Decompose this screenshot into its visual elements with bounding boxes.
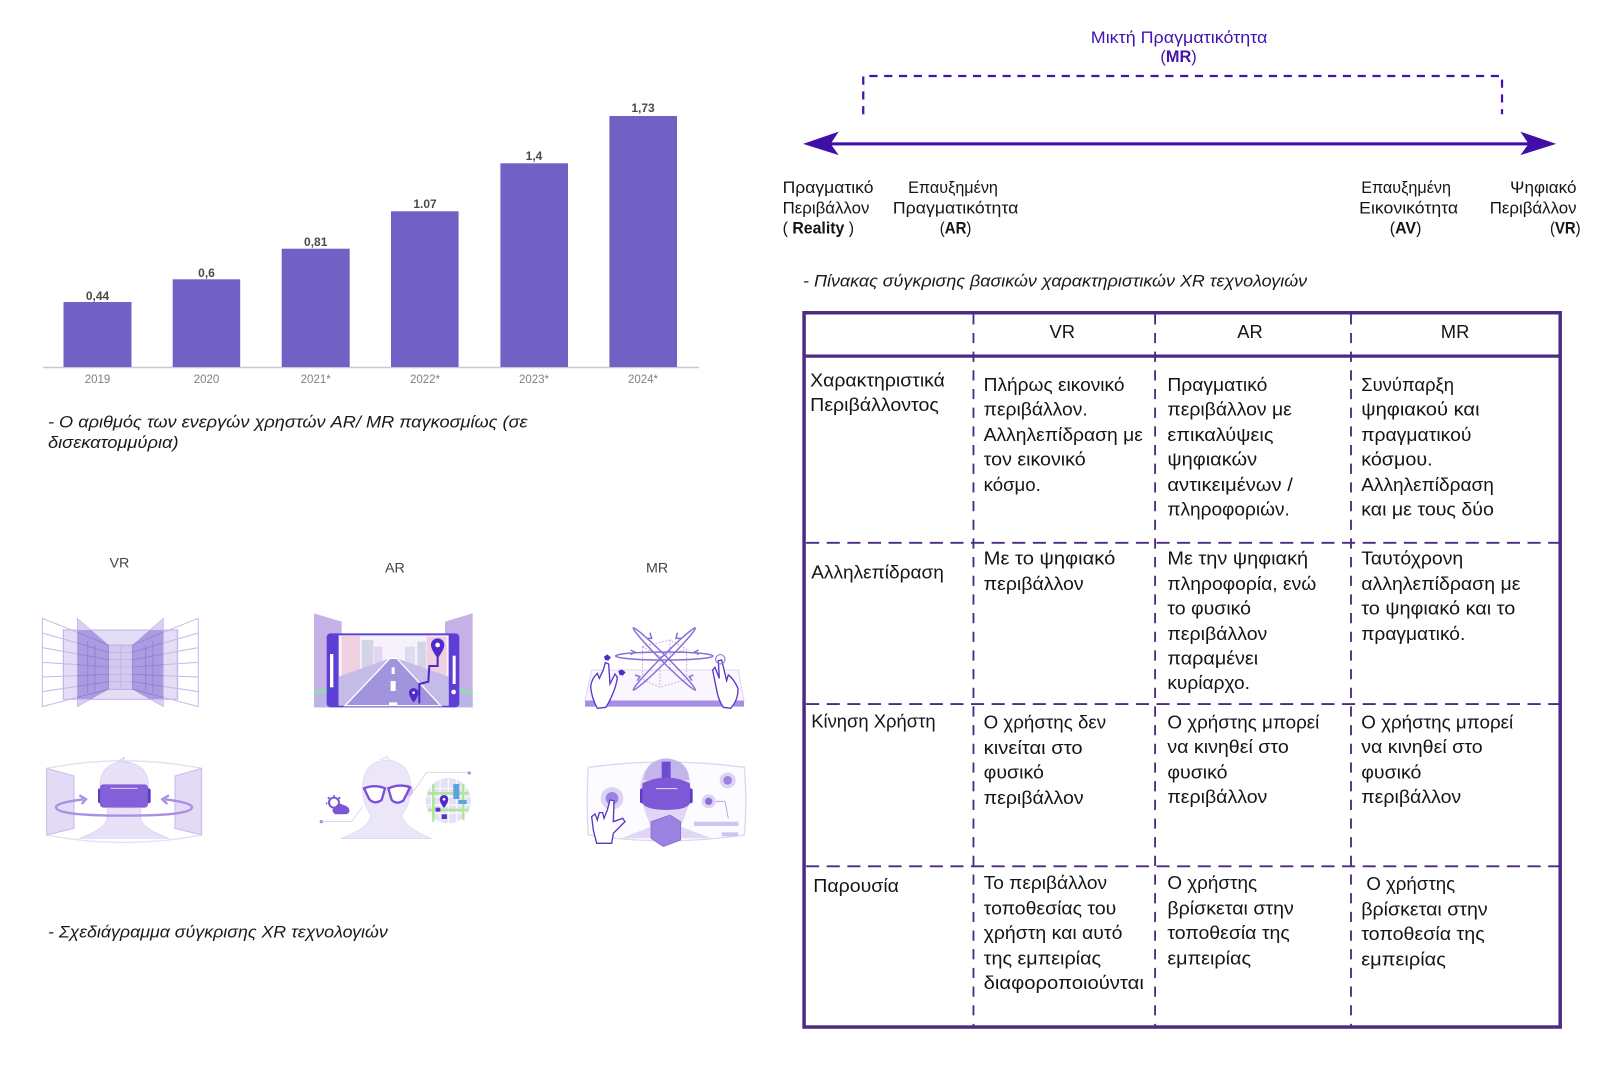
row: user movement: περιβάλλον [1167,786,1267,807]
row: interaction: αλληλεπίδραση με [1361,573,1520,594]
row: environment [810,370,1494,519]
year labels: 2023* [519,374,550,386]
row: environment: ψηφιακού και [1361,398,1480,419]
row: interaction: Με την ψηφιακή [1167,547,1308,568]
row: interaction: Αλληλεπίδραση [811,562,944,583]
row: user movement: κινείται στο [984,737,1083,758]
value labels: 0,44 [86,289,110,303]
label: mixed reality: (MR) [1160,48,1197,66]
row: presence: εμπειρίας [1167,947,1251,968]
row: environment: κόσμο. [984,474,1041,495]
row: interaction [811,547,1520,693]
row: presence: τοποθεσίας του [984,897,1116,918]
row: user movement [811,711,1513,808]
row: environment: Χαρακτηριστικά [810,370,945,391]
column labels: VR AR MR: AR [385,560,405,576]
row: interaction: το ψηφιακό και το [1361,597,1515,618]
label: VR [1490,179,1581,238]
year labels: 2021* [301,374,331,386]
row: interaction: πληροφορία, ενώ [1167,573,1316,594]
caption: chart: - Ο αριθμός των ενεργών χρηστών AR/ MR παγκοσμίως (σε [48,414,528,432]
row: user movement: να κινηθεί στο [1167,736,1289,757]
label: AR: Επαυξημένη [908,179,998,197]
row: user movement: περιβάλλον [1361,786,1461,807]
row: presence: Παρουσία [813,875,899,896]
row: presence: Ο χρήστης [1366,873,1455,894]
row: interaction: παραμένει [1167,647,1258,668]
year labels [85,374,659,386]
icon: AR phone navigation [314,613,473,707]
value labels [86,101,655,303]
row: environment: Περιβάλλοντος [810,394,939,415]
value labels: 1.07 [413,197,437,211]
row: interaction: περιβάλλον [1167,623,1267,644]
value labels: 1,73 [631,101,655,115]
bars [64,116,677,367]
row: environment: και με τους δύο [1361,498,1494,519]
row: environment: κόσμου. [1361,448,1433,469]
year labels: 2022* [410,374,441,386]
caption: chart [48,414,528,452]
row: environment: Συνύπαρξη [1361,374,1454,395]
label: AV: Επαυξημένη [1361,179,1451,197]
row: interaction: Με το ψηφιακό [984,547,1115,568]
column labels: VR AR MR: MR [646,560,668,576]
table header: MR [1441,321,1469,342]
row: interaction: πραγματικό. [1361,623,1465,644]
row: environment: Αλληλεπίδραση [1361,474,1494,495]
row: environment: περιβάλλον με [1167,398,1292,419]
row: presence: εμπειρίας [1361,948,1446,969]
row: user movement: Ο χρήστης μπορεί [1361,712,1513,733]
label: AR [893,179,1018,238]
double arrow [803,132,1556,155]
year labels: 2019 [85,374,110,386]
label: VR: Ψηφιακό [1510,179,1577,197]
row: environment: πραγματικού [1361,424,1471,445]
label: VR: Περιβάλλον [1490,199,1577,217]
row: environment: Πλήρως εικονικό [984,374,1124,395]
caption: table: - Πίνακας σύγκρισης βασικών χαρακτηριστικών XR τεχνολογιών [803,273,1308,291]
year labels: 2024* [628,374,659,386]
row: presence: βρίσκεται στην [1361,898,1488,919]
column labels: VR AR MR: VR [109,555,129,571]
label: mixed reality [1091,29,1267,66]
row: interaction: περιβάλλον [984,573,1084,594]
bar chart: active AR/MR users [43,101,699,386]
row: interaction: το φυσικό [1167,597,1251,618]
table header [1049,321,1469,342]
label: AR: (AR) [940,220,971,238]
label: AV [1359,179,1458,238]
row: presence: βρίσκεται στην [1167,897,1294,918]
icon: AR glasses user [320,757,471,839]
label: AV: (AV) [1390,220,1421,238]
row: user movement: φυσικό [984,762,1044,783]
value labels: 1,4 [526,149,543,163]
caption: comparison diagram: - Σχεδιάγραμμα σύγκρισης XR τεχνολογιών [48,924,389,942]
row: presence: της εμπειρίας [984,947,1101,968]
row: environment: τον εικονικό [984,448,1086,469]
row: environment: περιβάλλον. [984,398,1088,419]
row: interaction: κυρίαρχο. [1167,672,1250,693]
row: presence: τοποθεσία της [1361,923,1485,944]
row: user movement: Κίνηση Χρήστη [811,711,936,732]
label: VR: (VR) [1550,220,1581,238]
row: presence: διαφοροποιούνται [984,972,1144,993]
comparison table [804,313,1560,1027]
row: user movement: φυσικό [1167,762,1228,783]
caption: chart: δισεκατομμύρια) [48,434,179,452]
icon: MR hand gestures [585,626,744,708]
label: AR: Πραγματικότητα [893,199,1018,217]
label: mixed reality: Μικτή Πραγματικότητα [1091,29,1267,47]
icon: VR room grid [42,618,198,707]
row: presence: Ο χρήστης [1167,872,1257,893]
row: environment: επικαλύψεις [1167,424,1274,445]
row: user movement: να κινηθεί στο [1361,736,1483,757]
year labels: 2020 [194,374,219,386]
dashed bracket [863,76,1502,114]
table grid [804,313,1560,1027]
row: presence: τοποθεσία της [1167,922,1290,943]
row: environment: πληροφοριών. [1167,498,1290,519]
row: presence: χρήστη και αυτό [984,922,1122,943]
label: AV: Εικονικότητα [1359,199,1458,217]
row: user movement: φυσικό [1361,762,1421,783]
row: presence: Το περιβάλλον [984,872,1107,893]
row: user movement: περιβάλλον [984,787,1084,808]
label: reality: Πραγματικό [783,179,873,197]
label: reality: Περιβάλλον [783,199,869,217]
row: environment: Αλληλεπίδραση με [984,424,1143,445]
table header: AR [1237,321,1263,342]
column labels: VR AR MR [109,555,668,576]
value labels: 0,81 [304,235,328,249]
row: user movement: Ο χρήστης δεν [984,712,1106,733]
row: environment: Πραγματικό [1167,374,1267,395]
label: reality: ( Reality ) [783,220,854,238]
icon: VR headset user [47,757,202,842]
row: environment: ψηφιακών [1167,448,1257,469]
row: environment: αντικειμένων / [1167,474,1294,495]
value labels: 0,6 [198,266,215,280]
row: user movement: Ο χρήστης μπορεί [1167,712,1319,733]
row: presence [813,872,1488,993]
row: interaction: Ταυτόχρονη [1361,547,1463,568]
chart axis [43,366,699,368]
label: reality [783,179,873,238]
spectrum diagram: reality to virtuality [783,29,1581,238]
icon: MR headset user [587,758,746,847]
table header: VR [1049,321,1075,342]
